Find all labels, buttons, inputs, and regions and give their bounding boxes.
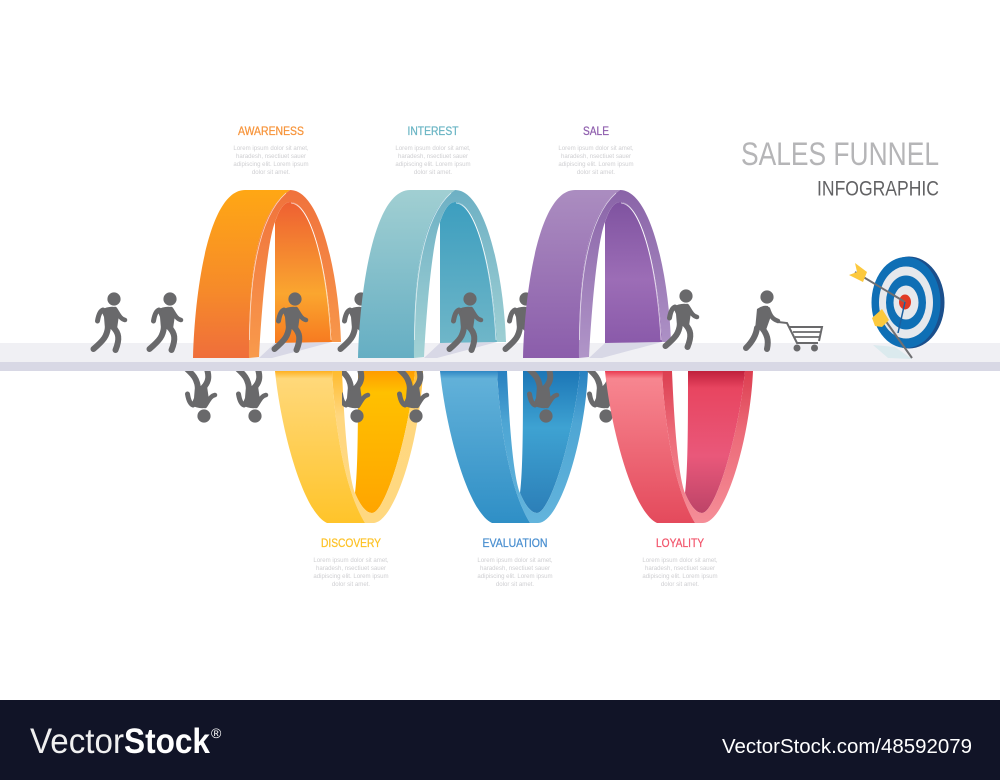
- panel: discovery text: [313, 538, 389, 588]
- footer logo: Stock: [124, 722, 210, 761]
- panel: awareness text: haradesh, nsectiuet sauer: [236, 153, 306, 160]
- panel: evaluation text: haradesh, nsectiuet sauer: [480, 565, 550, 572]
- title: [741, 136, 939, 200]
- person inside interest arch: [450, 292, 481, 350]
- title: SALES FUNNEL: [741, 136, 939, 172]
- panel: loyality text: [642, 538, 718, 588]
- ring: loyality: [605, 371, 753, 523]
- platform: [0, 343, 1000, 371]
- footer logo: Vector: [30, 722, 124, 761]
- person behind sale arch: [506, 292, 537, 350]
- arch: sale: [523, 190, 671, 358]
- footer bar: [0, 700, 1000, 780]
- arch: awareness: [193, 190, 341, 358]
- panel: loyality text: haradesh, nsectiuet sauer: [645, 565, 715, 572]
- panel: evaluation text: dolor sit amet.: [496, 581, 534, 588]
- panel: evaluation text: EVALUATION: [482, 538, 548, 550]
- panel: evaluation text: Lorem ipsum dolor sit amet,: [477, 557, 553, 564]
- person behind interest arch: [340, 292, 372, 350]
- panel: discovery text: adipiscing elit. Lorem ipsum: [313, 573, 389, 580]
- panel: interest text: haradesh, nsectiuet sauer: [398, 153, 468, 160]
- panel: awareness text: Lorem ipsum dolor sit amet,: [233, 145, 309, 152]
- panel: sale text: Lorem ipsum dolor sit amet,: [558, 145, 634, 152]
- ring: evaluation: [440, 371, 588, 523]
- panel: loyality text: adipiscing elit. Lorem ipsum: [642, 573, 718, 580]
- panel: interest text: dolor sit amet.: [414, 169, 452, 176]
- panel: evaluation text: [477, 538, 553, 588]
- panel: sale text: SALE: [583, 126, 609, 138]
- icon: cart: [778, 322, 822, 352]
- panel: interest text: Lorem ipsum dolor sit amet,: [395, 145, 471, 152]
- footer id: VectorStock.com/48592079: [722, 736, 972, 758]
- panel: awareness text: [233, 126, 309, 176]
- panel: sale text: adipiscing elit. Lorem ipsum: [558, 161, 634, 168]
- panel: awareness text: AWARENESS: [238, 126, 304, 138]
- panel: loyality text: dolor sit amet.: [661, 581, 699, 588]
- panel: loyality text: Lorem ipsum dolor sit amet,: [642, 557, 718, 564]
- panel: evaluation text: adipiscing elit. Lorem ipsum: [477, 573, 553, 580]
- panel: loyality text: LOYALITY: [656, 538, 704, 550]
- arrow: bullseye hit: [849, 263, 905, 302]
- arch: interest: [358, 190, 506, 358]
- person inside awareness arch: [274, 292, 306, 350]
- panel: discovery text: dolor sit amet.: [332, 581, 370, 588]
- panel: sale text: dolor sit amet.: [577, 169, 615, 176]
- arrow: stuck in target: [872, 309, 912, 358]
- ring: discovery: [275, 371, 423, 523]
- people walking underside: [184, 371, 612, 423]
- panel: discovery text: DISCOVERY: [321, 538, 381, 550]
- icon: target with arrows: [849, 256, 944, 359]
- person leaving sale arch: [666, 289, 697, 347]
- panel: discovery text: haradesh, nsectiuet sauer: [316, 565, 386, 572]
- person with shopping cart: [746, 290, 822, 352]
- subtitle: INFOGRAPHIC: [817, 176, 939, 200]
- panel: awareness text: adipiscing elit. Lorem ipsum: [233, 161, 309, 168]
- panel: interest text: adipiscing elit. Lorem ipsum: [395, 161, 471, 168]
- footer logo: [30, 722, 210, 761]
- panel: sale text: [558, 126, 634, 176]
- panel: interest text: INTEREST: [408, 126, 458, 138]
- registered mark: ®: [211, 725, 222, 741]
- panel: awareness text: dolor sit amet.: [252, 169, 290, 176]
- people left: [94, 292, 181, 350]
- panel: interest text: [395, 126, 471, 176]
- panel: discovery text: Lorem ipsum dolor sit amet,: [313, 557, 389, 564]
- panel: sale text: haradesh, nsectiuet sauer: [561, 153, 631, 160]
